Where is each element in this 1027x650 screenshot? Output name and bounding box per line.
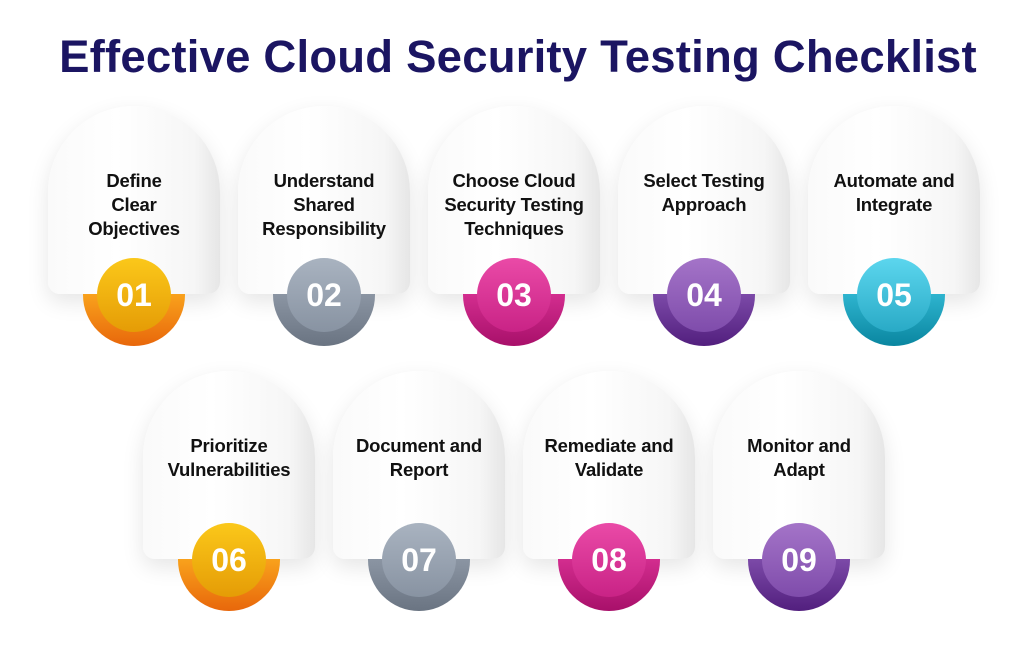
step 01: 01 (116, 277, 152, 313)
step 06 (138, 390, 320, 611)
step 01 (44, 125, 224, 346)
step 09: Adapt (773, 459, 825, 480)
step 02: Understand (274, 170, 374, 191)
step 03: Techniques (464, 218, 564, 239)
step 08 (518, 389, 700, 611)
step 08: Validate (575, 459, 643, 480)
step 04: Approach (662, 194, 746, 215)
step 07 (328, 389, 510, 611)
step 09: Monitor and (747, 435, 851, 456)
step 01: Clear (111, 194, 157, 215)
step 03: Choose Cloud (452, 170, 575, 191)
step 06: Prioritize (190, 435, 268, 456)
step 04: 04 (686, 277, 722, 313)
step 05 (804, 125, 984, 346)
step 03: Security Testing (444, 194, 584, 215)
step 03: 03 (496, 277, 532, 313)
step 01: Objectives (88, 218, 180, 239)
step 08: 08 (591, 542, 627, 578)
step 05: 05 (876, 277, 912, 313)
step 06: Vulnerabilities (168, 459, 290, 480)
step 07: Report (390, 459, 448, 480)
step 01: Define (106, 170, 162, 191)
step 09: 09 (781, 542, 817, 578)
step 06: 06 (211, 542, 247, 578)
step 02 (234, 124, 414, 346)
step 02: Shared (293, 194, 355, 215)
step 09 (708, 390, 890, 611)
step 02: 02 (306, 277, 342, 313)
step 04: Select Testing (643, 170, 765, 191)
step 07: Document and (356, 435, 482, 456)
step 07: 07 (401, 542, 437, 578)
title: Effective Cloud Security Testing Checklist (59, 31, 977, 82)
step 05: Integrate (856, 194, 932, 215)
step 03 (424, 124, 604, 346)
step 05: Automate and (834, 170, 954, 191)
step 08: Remediate and (544, 435, 674, 456)
step 02: Responsibility (262, 218, 386, 239)
step 04 (614, 125, 794, 346)
